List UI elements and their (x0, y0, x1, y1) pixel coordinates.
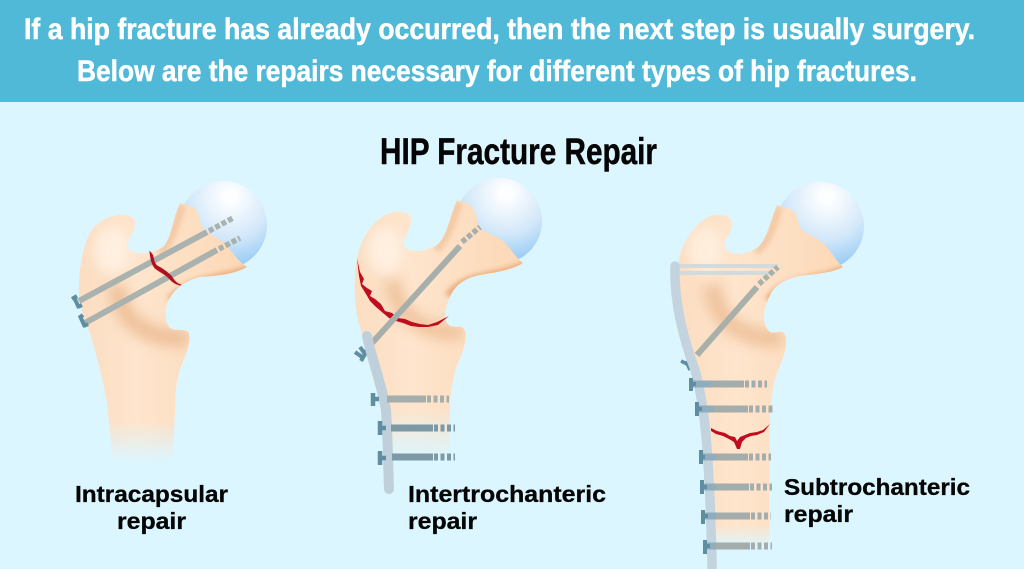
side plate (675, 266, 712, 569)
label: intertrochanteric repair: repair (408, 508, 477, 534)
femur bone (678, 205, 843, 544)
femoral head (179, 181, 267, 269)
diagram: subtrochanteric repair (670, 182, 864, 569)
diagram: intracapsular repair (70, 181, 267, 470)
hip plate top screws (677, 266, 778, 370)
label: intracapsular repair (75, 481, 228, 534)
label: subtrochanteric repair: Subtrochanteric (784, 474, 970, 500)
lower screws (691, 378, 773, 554)
header banner (0, 0, 1024, 102)
side plate (367, 336, 389, 489)
femur bone (78, 203, 247, 459)
main screw (355, 227, 480, 361)
femur bone (354, 200, 523, 451)
title: HIP Fracture Repair (380, 131, 657, 172)
label: subtrochanteric repair (784, 474, 970, 527)
screws (72, 218, 240, 327)
fracture line (150, 252, 181, 285)
fracture line (711, 424, 770, 449)
label: intracapsular repair: Intracapsular (75, 481, 228, 507)
fracture line (357, 258, 449, 327)
label: intertrochanteric repair: Intertrochanteric (408, 481, 606, 507)
femoral head (456, 178, 542, 264)
diagram: intertrochanteric repair (345, 178, 542, 489)
header text line 2: Below are the repairs necessary for different types of hip fractures. (77, 55, 917, 88)
lower screws (373, 393, 455, 465)
label: intracapsular repair: repair (117, 508, 186, 534)
label: intertrochanteric repair (408, 481, 606, 534)
femoral head (776, 182, 864, 270)
label: subtrochanteric repair: repair (784, 501, 853, 527)
